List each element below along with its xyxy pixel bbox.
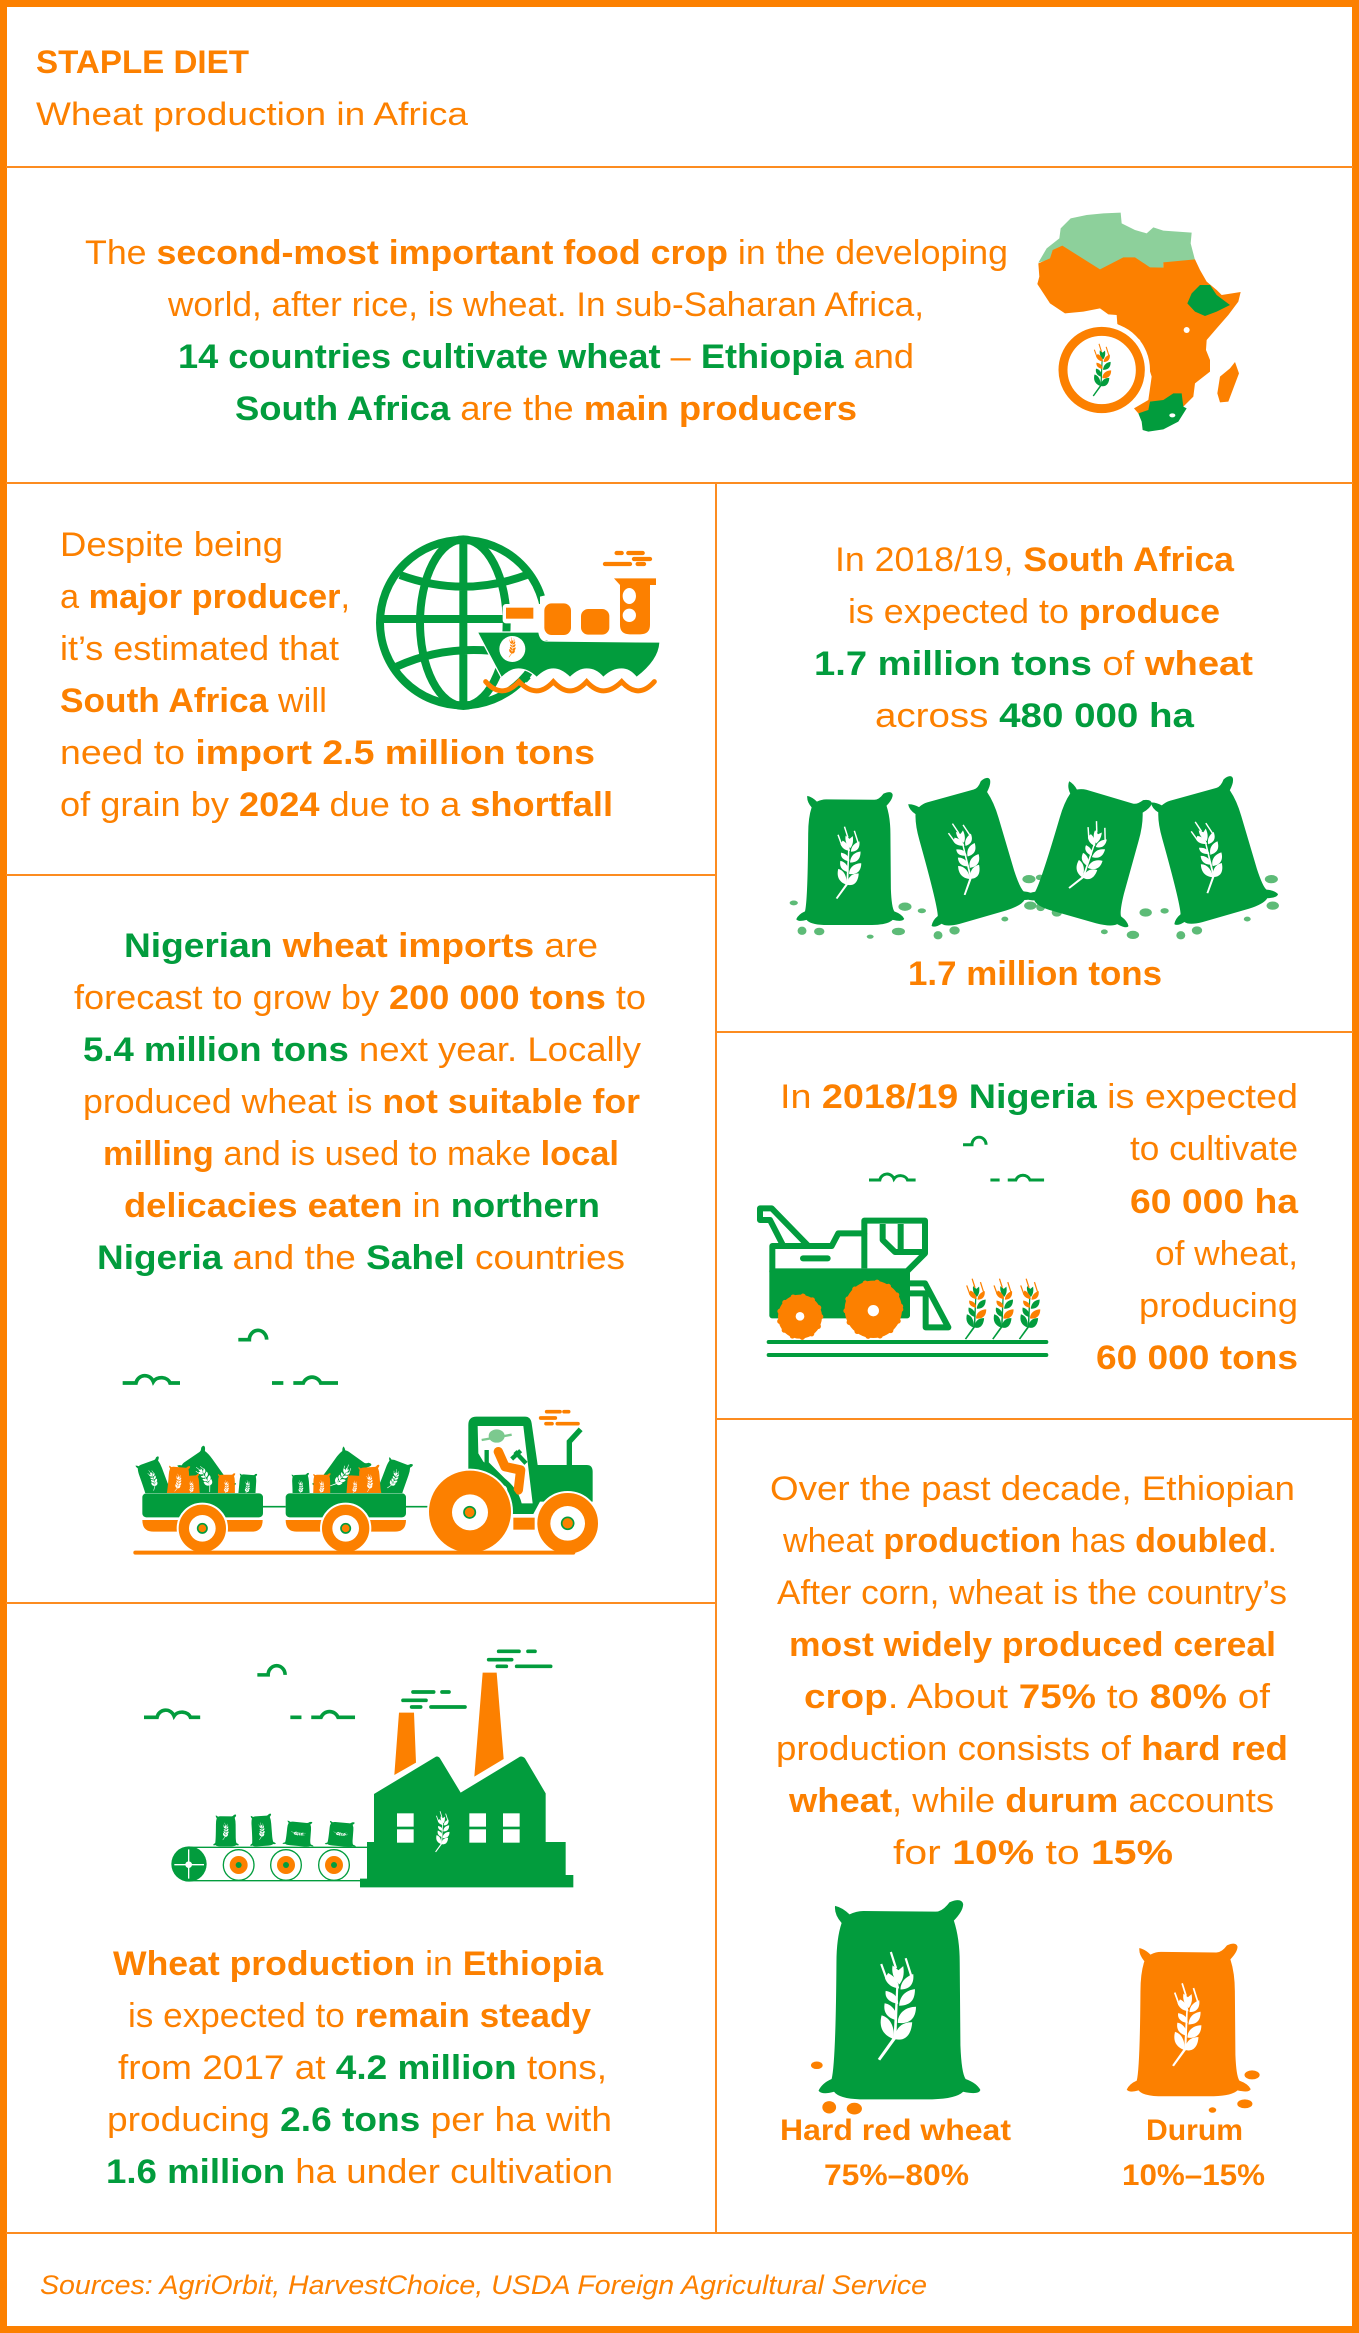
label: durum: 10%–15% [1122,2159,1265,2192]
imports text: Despite being [60,526,283,564]
South Africa production text: 1.7 million tons of wheat [814,645,1253,683]
Nigeria imports text: delicacies eaten in northern [124,1187,600,1225]
label: hard red wheat [780,2114,1011,2192]
chart: hard red wheat sack [811,1900,980,2115]
Nigeria imports text [74,927,646,1277]
Ethiopian wheat text: production consists of hard red [776,1730,1288,1768]
icon: combine harvester [760,1137,1046,1355]
Ethiopian wheat text [770,1470,1295,1872]
Nigeria cultivation text: 60 000 ha [1130,1183,1299,1221]
chart: durum sack [1127,1944,1260,2113]
intro text: The second-most important food crop in the developing [85,234,1008,272]
imports text: South Africa will [60,682,327,720]
Ethiopian wheat text: wheat production has doubled. [782,1522,1277,1560]
imports text: it’s estimated that [60,630,340,668]
Ethiopian wheat text: wheat, while durum accounts [788,1782,1274,1820]
Ethiopia production text: 1.6 million ha under cultivation [106,2153,613,2191]
South Africa production text: is expected to produce [848,593,1220,631]
Nigeria imports text: 5.4 million tons next year. Locally [83,1031,641,1069]
sack caption: 1.7 million tons [908,955,1162,993]
imports text: need to import 2.5 million tons [60,734,595,772]
title: STAPLE DIET [36,44,249,80]
label: durum [1122,2114,1265,2192]
South Africa production text [814,541,1253,735]
intro text [85,234,1008,428]
Nigeria cultivation text: 60 000 tons [1096,1339,1298,1377]
Ethiopia production text: producing 2.6 tons per ha with [107,2101,612,2139]
intro text: world, after rice, is wheat. In sub-Saharan Africa, [167,286,924,324]
Nigeria imports text: Nigerian wheat imports are [124,927,598,965]
imports text: of grain by 2024 due to a shortfall [60,786,613,824]
Ethiopia production text [106,1945,613,2191]
title [36,44,468,132]
Ethiopia production text: is expected to remain steady [128,1997,591,2035]
Nigeria imports text: Nigeria and the Sahel countries [97,1239,625,1277]
sources: Sources: AgriOrbit, HarvestChoice, USDA Foreign Agricultural Service [40,2270,927,2300]
panel: Ethiopian wheat types [770,1470,1295,2192]
Nigeria imports text: produced wheat is not suitable for [83,1083,640,1121]
icon: tractor pulling wheat trailers [123,1330,599,1555]
Nigeria cultivation text: producing [1139,1287,1298,1325]
Ethiopia production text: from 2017 at 4.2 million tons, [118,2049,607,2087]
Ethiopian wheat text: After corn, wheat is the country’s [777,1574,1287,1612]
Ethiopia production text: Wheat production in Ethiopia [113,1945,604,1983]
panel: introduction [85,213,1241,432]
Nigeria cultivation text: of wheat, [1155,1235,1298,1273]
South Africa production text: across 480 000 ha [875,697,1195,735]
map of Africa [1037,213,1241,432]
Nigeria cultivation text [780,1078,1299,1377]
panel: South Africa production [790,541,1280,993]
label: hard red wheat: Hard red wheat [780,2114,1011,2147]
Ethiopian wheat text: crop . About 75% to 80% of [804,1678,1271,1716]
panel: Nigeria cultivation [760,1078,1299,1377]
intro text: 14 countries cultivate wheat – Ethiopia and [178,338,914,376]
panel: South Africa imports [60,526,659,824]
Nigeria cultivation text: to cultivate [1130,1130,1298,1168]
Nigeria cultivation text: In 2018/19 Nigeria is expected [780,1078,1298,1116]
Nigeria imports text: milling and is used to make local [103,1135,619,1173]
icon: factory with conveyor belt [144,1651,573,1887]
imports text: a major producer, [60,578,350,616]
Nigeria imports text: forecast to grow by 200 000 tons to [74,979,646,1017]
panel: Ethiopia production [106,1651,613,2191]
title: Wheat production in Africa [36,96,468,132]
label: hard red wheat: 75%–80% [824,2159,969,2192]
intro text: South Africa are the main producers [235,390,857,428]
Ethiopian wheat text: most widely produced cereal [789,1626,1276,1664]
icon: globe and cargo ship [380,539,659,706]
Ethiopian wheat text: Over the past decade, Ethiopian [770,1470,1295,1508]
Ethiopian wheat text: for 10% to 15% [893,1834,1173,1872]
panel: Nigerian imports [74,927,646,1555]
label: durum: Durum [1146,2114,1243,2147]
imports text [60,526,613,824]
South Africa production text: In 2018/19, South Africa [835,541,1235,579]
icon: four wheat sacks [790,772,1280,939]
